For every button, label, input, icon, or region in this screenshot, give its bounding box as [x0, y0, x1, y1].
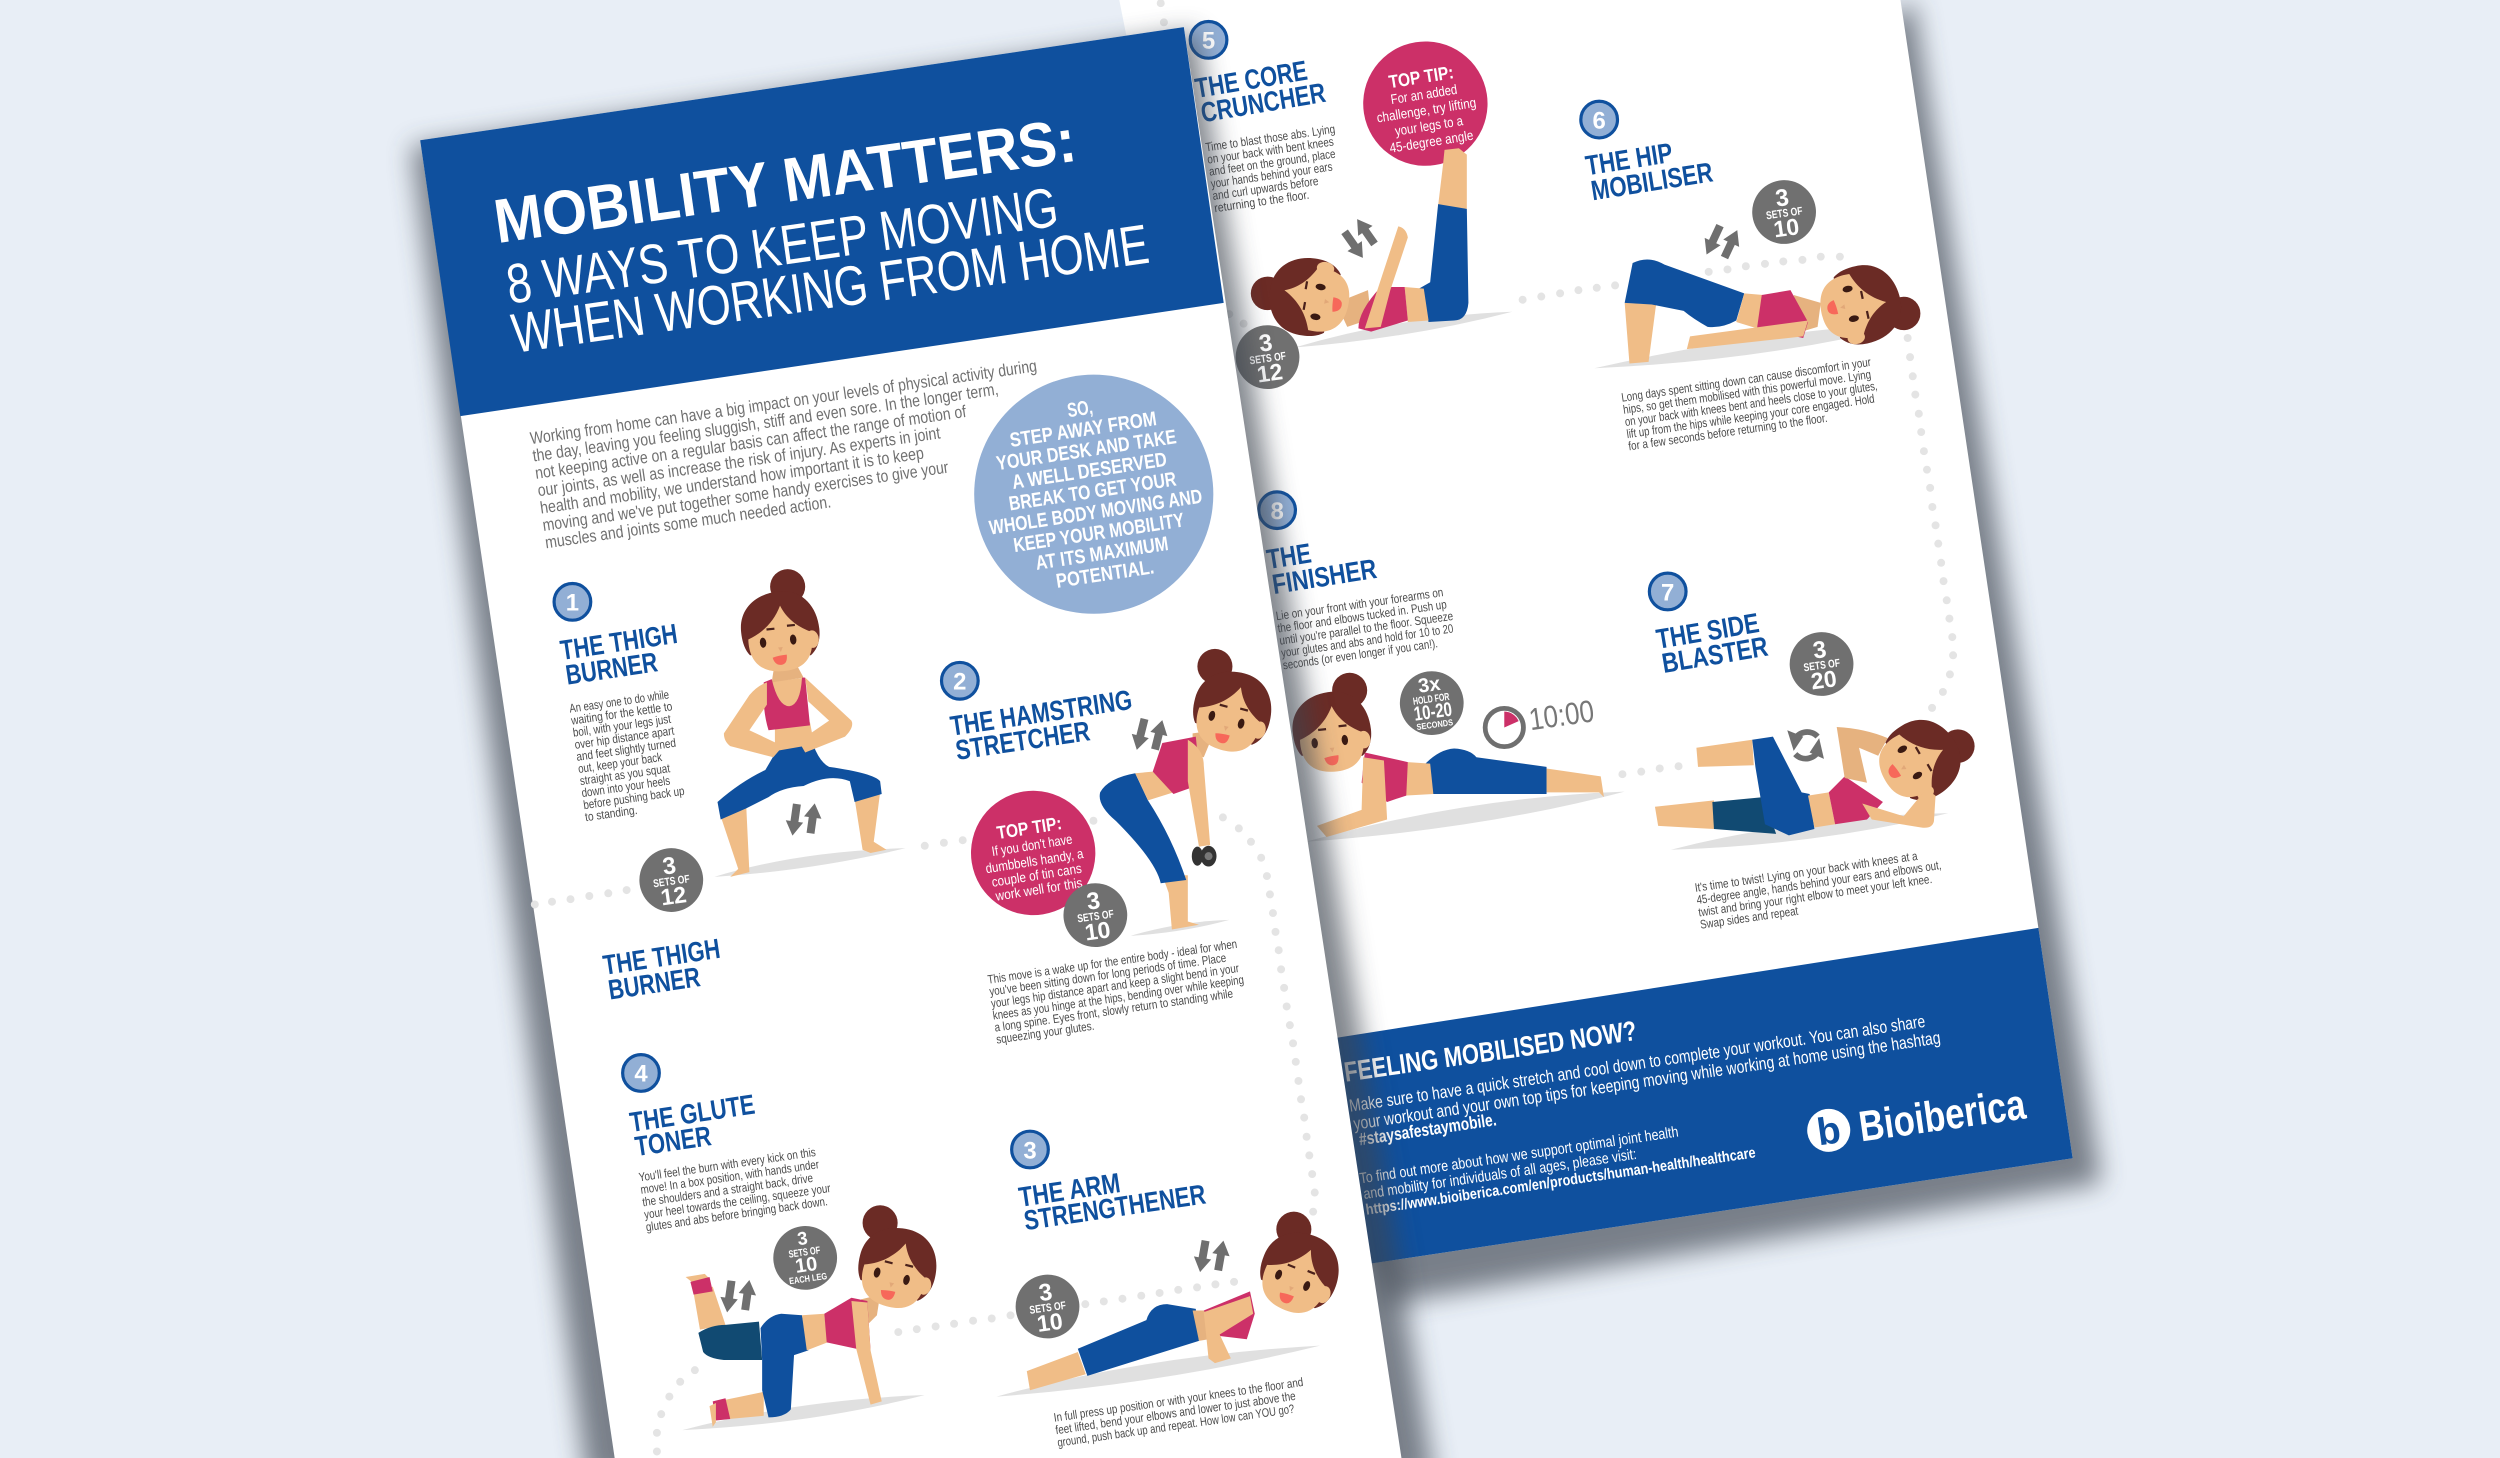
figure: plank woman: [1289, 673, 1625, 842]
number badge 2: 2: [953, 669, 966, 696]
stat: 3 sets of 10 arm: SETS OF: [1029, 1301, 1068, 1317]
text: glute toner instructions: your heel towards the ceiling, squeeze your: [643, 1181, 832, 1222]
text: arm strengthener instructions: In full press up position or with your knees to the floor and: [1053, 1375, 1304, 1425]
intro paragraph: our joints, as well as increase the risk of injury. As experts in joint: [536, 424, 942, 501]
number badge 6: 6: [1593, 108, 1606, 135]
heading: the core cruncher: CRUNCHER: [1198, 76, 1328, 129]
text: thigh burner instructions: over hip distance apart: [574, 723, 676, 752]
stat: 3 sets of 10 hamstring: [1059, 879, 1131, 951]
heading: the glute toner: THE GLUTE: [628, 1088, 757, 1138]
text: finisher instructions: until you're parallel to the floor. Squeeze: [1278, 609, 1454, 648]
text: cool down advice: #staysafestaymobile.: [1358, 1111, 1498, 1150]
intro paragraph: the day, leaving you feeling sluggish, stiff and even sore. In the longer term,: [531, 380, 1000, 466]
intro paragraph: muscles and joints some much needed action.: [544, 493, 832, 553]
number badge 5: 5: [1202, 28, 1215, 55]
text: side blaster instructions: [1694, 846, 1946, 932]
number badge 3: [1012, 1131, 1048, 1168]
logo: bioiberica: Bioiberica: [1856, 1080, 2030, 1151]
text: side blaster instructions: 45-degree angle, hands behind your ears and elbows out,: [1696, 858, 1942, 907]
text: core cruncher instructions: and feet on the ground, place: [1208, 147, 1336, 179]
stat: 3 sets of 10 each leg: 3: [796, 1230, 809, 1250]
heading: the hip mobiliser: THE HIP: [1583, 136, 1675, 182]
intro paragraph: health and mobility, we understand how important it is to keep: [539, 444, 925, 518]
number badge 7: 7: [1661, 580, 1674, 607]
heading: the thigh burner: [558, 617, 683, 691]
heading: the side blaster: THE SIDE: [1654, 607, 1761, 655]
text: core cruncher instructions: returning to the floor.: [1213, 188, 1310, 215]
stat: 3 sets of 10 hip: SETS OF: [1765, 206, 1804, 222]
stat: 3 sets of 10 arm: 3: [1037, 1279, 1054, 1307]
heading: the hamstring stretcher: [948, 683, 1138, 767]
stat: 3 sets of 12 core: [1232, 321, 1304, 393]
callout: top tip dumbbells: [962, 782, 1104, 924]
stat: 3x hold for 10-20 seconds: SECONDS: [1416, 719, 1454, 733]
stat: 3x hold for 10-20 seconds: [1396, 667, 1468, 739]
heading: the side blaster: BLASTER: [1660, 630, 1771, 679]
icon: movement arrows squat: [784, 800, 823, 839]
heading: the finisher: THE: [1264, 537, 1313, 575]
heading: the arm strengthener: STRENGTHENER: [1022, 1178, 1208, 1237]
text: arm strengthener instructions: feet lifted, bend your elbows and lower to just above the: [1055, 1389, 1296, 1437]
panel: right page: [1119, 0, 2101, 1304]
text: hamstring instructions: you've been sitting down for long periods of time. Place: [988, 951, 1227, 999]
text: hamstring instructions: [987, 936, 1248, 1047]
number badge 5: [1190, 22, 1227, 58]
heading: the side blaster: [1654, 606, 1771, 680]
stat: 3 sets of 12 thigh: SETS OF: [653, 874, 691, 891]
text: hip mobiliser instructions: Long days spent sitting down can cause discomfort in your: [1620, 355, 1872, 405]
text: thigh burner instructions: before pushing back up: [582, 784, 685, 812]
text: thigh burner instructions: [567, 687, 687, 825]
number badge 1: 1: [566, 590, 579, 617]
figure: hamstring bend woman: [1100, 649, 1280, 936]
logo: bioiberica: b: [1814, 1109, 1844, 1155]
panel: left page: [411, 27, 1435, 1458]
number badge 8: [1259, 492, 1295, 529]
subtitle: WHEN WORKING FROM HOME: [508, 213, 1153, 365]
callout: intro circle: STEP AWAY FROM: [1008, 408, 1158, 452]
text: hamstring instructions: a long spine. Eyes front, slowly return to standing while: [994, 986, 1234, 1035]
stat: 3 sets of 12 thigh: [635, 844, 707, 916]
figure: hip bridge woman: [1594, 258, 1920, 368]
callout: top tip legs: challenge, try lifting: [1376, 94, 1477, 126]
text: hamstring instructions: your legs hip distance apart and keep a slight bend in your: [990, 961, 1240, 1011]
number badge 3: 3: [1023, 1138, 1037, 1165]
heading: the core cruncher: [1193, 52, 1328, 129]
logo: bioiberica: [1804, 1080, 2030, 1156]
stat: 3 sets of 20 side: SETS OF: [1803, 658, 1842, 674]
text: finisher instructions: [1275, 584, 1458, 673]
heading: the finisher: [1264, 527, 1379, 601]
icon: stopwatch: [1485, 708, 1523, 747]
text: side blaster instructions: twist and bring your right elbow to meet your left knee.: [1697, 872, 1933, 920]
number badge 4: [623, 1055, 659, 1091]
stat: 3 sets of 10 arm: 10: [1035, 1309, 1064, 1338]
heading: the arm strengthener: THE ARM: [1017, 1167, 1122, 1213]
callout: top tip dumbbells: work well for this: [993, 874, 1083, 904]
callout: intro circle: WHOLE BODY MOVING AND: [988, 485, 1204, 539]
stat: 3 sets of 12 thigh: 3: [661, 852, 678, 881]
figure: core crunch woman: [1251, 148, 1512, 348]
stat: 3 sets of 20 side: 3: [1811, 636, 1828, 665]
callout: top tip dumbbells: couple of tin cans: [991, 860, 1083, 890]
stat: 3x hold for 10-20 seconds: HOLD FOR: [1412, 692, 1451, 708]
callout: top tip legs: TOP TIP:: [1388, 64, 1455, 93]
stat: 3 sets of 20 side: [1786, 628, 1858, 700]
text: hip mobiliser instructions: for a few seconds before returning to the floor.: [1627, 411, 1828, 454]
text: thigh burner instructions: out, keep your back: [577, 750, 663, 776]
subtitle: 8 WAYS TO KEEP MOVING: [502, 176, 1062, 316]
stat: 3x hold for 10-20 seconds: 10-20: [1412, 698, 1454, 725]
text: finisher instructions: your glutes and abs and hold for 10 to 20: [1280, 621, 1454, 660]
icon: twist arrows: [1787, 730, 1824, 759]
intro paragraph: Working from home can have a big impact on your levels of physical activity during: [529, 357, 1038, 449]
heading: the hamstring stretcher: STRETCHER: [953, 715, 1093, 766]
number badge 8: 8: [1270, 498, 1284, 525]
callout: intro circle: KEEP YOUR MOBILITY: [1012, 509, 1186, 557]
stat: 3 sets of 10 each leg: 10: [794, 1252, 819, 1278]
stat: 3 sets of 10 hamstring: 10: [1083, 918, 1112, 947]
title: mobility matters: MOBILITY MATTERS:: [490, 107, 1080, 257]
icon: movement arrows hamstring: [1128, 714, 1171, 756]
callout: top tip legs: your legs to a: [1394, 112, 1464, 139]
text: thigh burner instructions: boil, with your legs just: [572, 712, 673, 740]
text: hamstring instructions: This move is a wake up for the entire body - ideal for when: [987, 937, 1238, 987]
heading: the thigh burner repeat: BURNER: [606, 961, 703, 1006]
heading: the thigh burner: BURNER: [563, 646, 660, 691]
callout: top tip legs: [1354, 32, 1497, 175]
title banner: [420, 27, 1224, 416]
callout: top tip dumbbells: TOP TIP:: [996, 815, 1063, 844]
icon: movement arrows press up: [1191, 1236, 1232, 1277]
text: glute toner instructions: [638, 1143, 834, 1234]
heading: the hip mobiliser: [1583, 131, 1715, 207]
callout: top tip legs: For an added: [1390, 81, 1458, 107]
stat: 3x hold for 10-20 seconds: 3x: [1417, 672, 1442, 698]
callout: intro circle: SO,: [1066, 396, 1094, 422]
stat: 3 sets of 10 hamstring: SETS OF: [1077, 909, 1115, 926]
text: arm strengthener instructions: ground, push back up and repeat. How low can YOU go?: [1056, 1402, 1295, 1450]
stat: 3 sets of 10 hip: [1748, 176, 1820, 248]
callout: intro circle: BREAK TO GET YOUR: [1007, 468, 1178, 515]
text: glute toner instructions: glutes and abs before bringing back down.: [645, 1194, 828, 1234]
text: glute toner instructions: move! In a box position, with hands under: [640, 1157, 820, 1197]
text: hamstring instructions: squeezing your glutes.: [995, 1019, 1095, 1047]
stat: 3 sets of 20 side: 20: [1809, 667, 1839, 696]
stat: 3 sets of 10 hamstring: 3: [1085, 887, 1102, 916]
stat: 3 sets of 12 thigh: 12: [659, 883, 688, 912]
callout: intro circle: A WELL DESERVED: [1011, 448, 1168, 494]
heading: the hamstring stretcher: THE HAMSTRING: [948, 683, 1134, 742]
text: hip mobiliser instructions: [1620, 354, 1882, 454]
number badge 4: 4: [634, 1061, 649, 1088]
heading: the thigh burner repeat: THE THIGH: [601, 932, 722, 981]
text: find out more: https://www.bioiberica.com/en/products/human-health/healthcare: [1365, 1145, 1757, 1220]
text: core cruncher instructions: your hands behind your ears: [1210, 159, 1334, 191]
text: finisher instructions: Lie on your front with your forearms on: [1275, 585, 1444, 623]
figure: squat woman: [714, 569, 906, 877]
text: hip mobiliser instructions: lift up from the hips while keeping your core engaged. Hold: [1626, 391, 1875, 441]
heading: the thigh burner repeat: [601, 932, 726, 1006]
text: hamstring instructions: knees as you hinge at the hips, bending over while keeping: [992, 972, 1245, 1023]
stat: 3 sets of 12 core: 12: [1255, 360, 1284, 389]
text: cool down advice: [1348, 1011, 1944, 1151]
text: core cruncher instructions: and curl upwards before: [1212, 174, 1319, 203]
dotted path: left page: [531, 813, 1319, 1455]
heading: the finisher: FINISHER: [1270, 552, 1379, 600]
stat: 3 sets of 10 each leg: SETS OF: [788, 1245, 821, 1261]
text: find out more: [1358, 1113, 1757, 1220]
dotted path: right page: [1157, 0, 1957, 778]
number badge 7: [1649, 573, 1686, 610]
text: finisher instructions: seconds (or even longer if you can!).: [1282, 636, 1439, 673]
text: thigh burner instructions: An easy one to do while: [568, 687, 670, 716]
heading: the glute toner: [628, 1088, 761, 1163]
callout: intro circle: AT ITS MAXIMUM: [1034, 533, 1170, 575]
text: thigh burner instructions: straight as you squat: [579, 761, 672, 788]
callout: top tip dumbbells: If you don't have: [991, 831, 1074, 859]
intro paragraph: [529, 357, 1053, 553]
label: 10:00: 10:00: [1527, 694, 1597, 738]
icon: movement arrows core: [1336, 214, 1384, 263]
figure: side twist woman: [1655, 707, 1975, 850]
callout: top tip legs: 45-degree angle: [1388, 127, 1475, 156]
intro paragraph: not keeping active on a regular basis can affect the range of motion of: [534, 403, 967, 484]
text: core cruncher instructions: on your back with bent knees: [1206, 134, 1335, 167]
heading: the hip mobiliser: MOBILISER: [1589, 156, 1715, 207]
heading: feeling mobilised now: FEELING MOBILISED NOW?: [1342, 1014, 1639, 1088]
callout: intro circle: YOUR DESK AND TAKE: [995, 426, 1178, 475]
callout: intro circle: POTENTIAL.: [1054, 556, 1156, 593]
text: finisher instructions: the floor and elbows tucked in. Push up: [1277, 597, 1448, 636]
text: thigh burner instructions: down into your heels: [581, 773, 671, 800]
stat: 3 sets of 10 hip: 10: [1772, 215, 1801, 244]
icon: movement arrows hip: [1699, 219, 1745, 266]
icon: movement arrows glute: [718, 1276, 758, 1316]
stat: 3 sets of 10 hip: 3: [1774, 184, 1791, 213]
text: hip mobiliser instructions: on your back with knees bent and heels close to your glutes,: [1624, 379, 1878, 429]
figure: glute kick woman: [682, 1205, 945, 1430]
footer band: [1315, 928, 2073, 1263]
text: side blaster instructions: Swap sides and repeat: [1699, 903, 1800, 932]
stat: 3 sets of 10 each leg: [769, 1222, 841, 1294]
text: glute toner instructions: You'll feel the burn with every kick on this: [638, 1145, 817, 1185]
text: thigh burner instructions: and feet slightly turned: [575, 736, 677, 764]
callout: intro circle: [972, 375, 1213, 614]
text: thigh burner instructions: waiting for the kettle to: [569, 699, 673, 728]
text: cool down advice: Make sure to have a quick stretch and cool down to complete your workout. You can also share: [1348, 1013, 1927, 1116]
text: glute toner instructions: the shoulders and a straight back, drive: [641, 1171, 814, 1209]
heading: the glute toner: TONER: [633, 1120, 714, 1162]
stat: 3 sets of 10 arm: [1012, 1271, 1084, 1343]
text: cool down advice: your workout and your own top tips for keeping moving while working at home using the hashtag: [1352, 1029, 1942, 1135]
text: core cruncher instructions: Time to blast those abs. Lying: [1205, 122, 1336, 155]
heading: the core cruncher: THE CORE: [1193, 54, 1310, 104]
stat: 3 sets of 10 each leg: EACH LEG: [788, 1271, 829, 1287]
stat: 3 sets of 12 core: 3: [1257, 329, 1274, 358]
text: find out more: and mobility for individuals of all ages, please visit:: [1362, 1146, 1638, 1204]
text: arm strengthener instructions: [1053, 1375, 1308, 1450]
number badge 2: [942, 662, 978, 699]
number badge 1: [554, 584, 591, 620]
figure: press up woman: [997, 1212, 1350, 1397]
number badge 6: [1581, 101, 1617, 138]
text: side blaster instructions: It's time to twist! Lying on your back with knees at a: [1694, 849, 1919, 895]
heading: the arm strengthener: [1017, 1154, 1208, 1237]
heading: the thigh burner: THE THIGH: [558, 617, 680, 666]
intro paragraph: moving and we've put together some handy exercises to give your: [541, 458, 950, 536]
text: thigh burner instructions: to standing.: [584, 803, 638, 824]
callout: top tip dumbbells: dumbbells handy, a: [984, 845, 1085, 876]
text: hip mobiliser instructions: hips, so get them mobilised with this powerful move. Lying: [1622, 367, 1872, 417]
stat: 3 sets of 12 core: SETS OF: [1249, 351, 1288, 368]
text: find out more: To find out more about how we support optimal joint health: [1358, 1124, 1680, 1188]
text: core cruncher instructions: [1205, 122, 1345, 215]
